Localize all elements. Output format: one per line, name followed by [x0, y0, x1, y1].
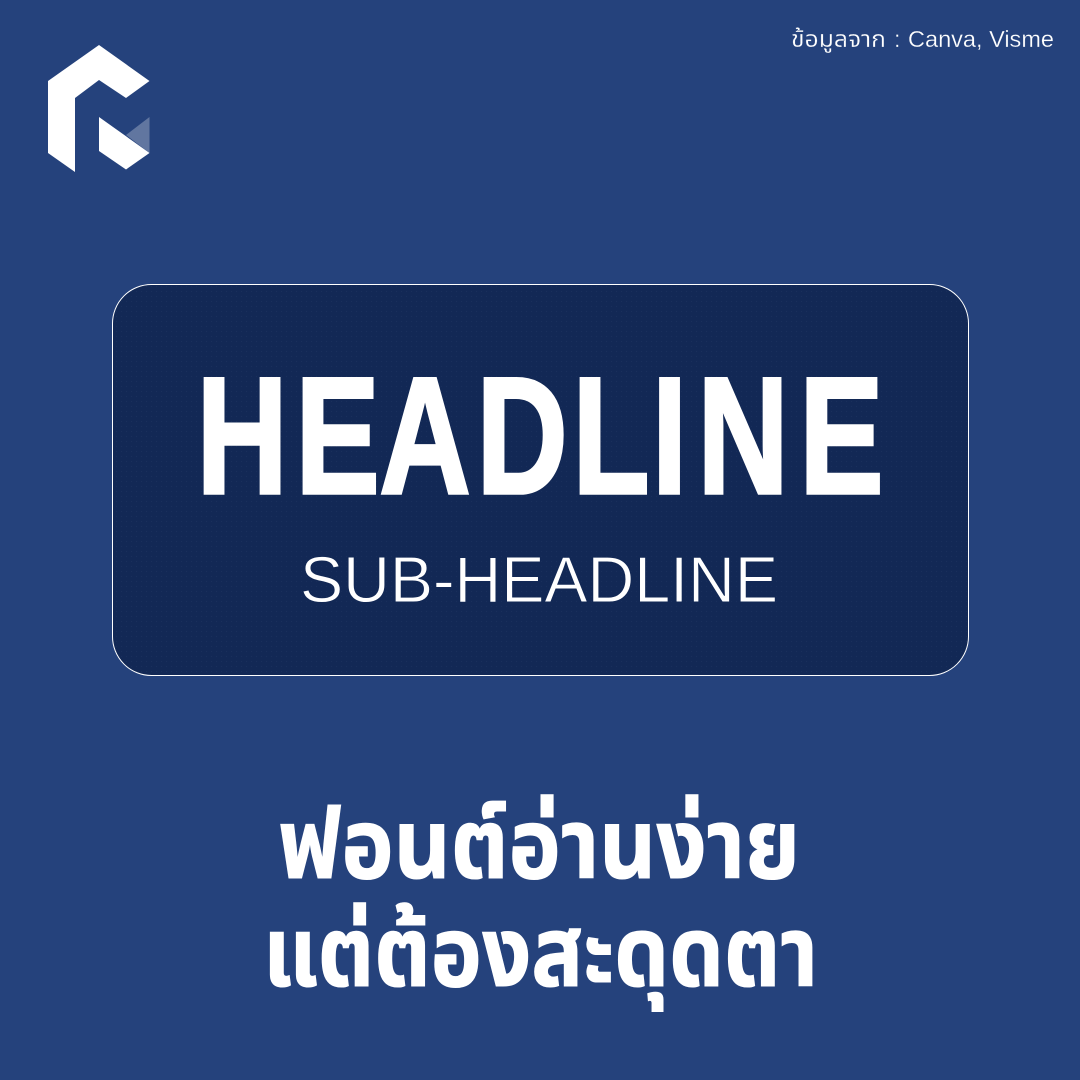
heading: HEADLINE: HEADLINE [197, 344, 884, 529]
panel: headline card [112, 284, 968, 676]
icon: logo [48, 45, 150, 172]
tagline line 2: แต่ต้องสะดุดตา [263, 897, 818, 1012]
source credit: Canva, Visme [908, 26, 1054, 52]
source credit: ข้อมูลจาก [791, 26, 886, 54]
source credit: : [894, 26, 901, 52]
thai tagline [263, 789, 818, 1012]
sub-heading: SUB-HEADLINE: SUB-HEADLINE [300, 543, 778, 616]
tagline line 1: ฟอนต์อ่านง่าย [278, 789, 800, 899]
